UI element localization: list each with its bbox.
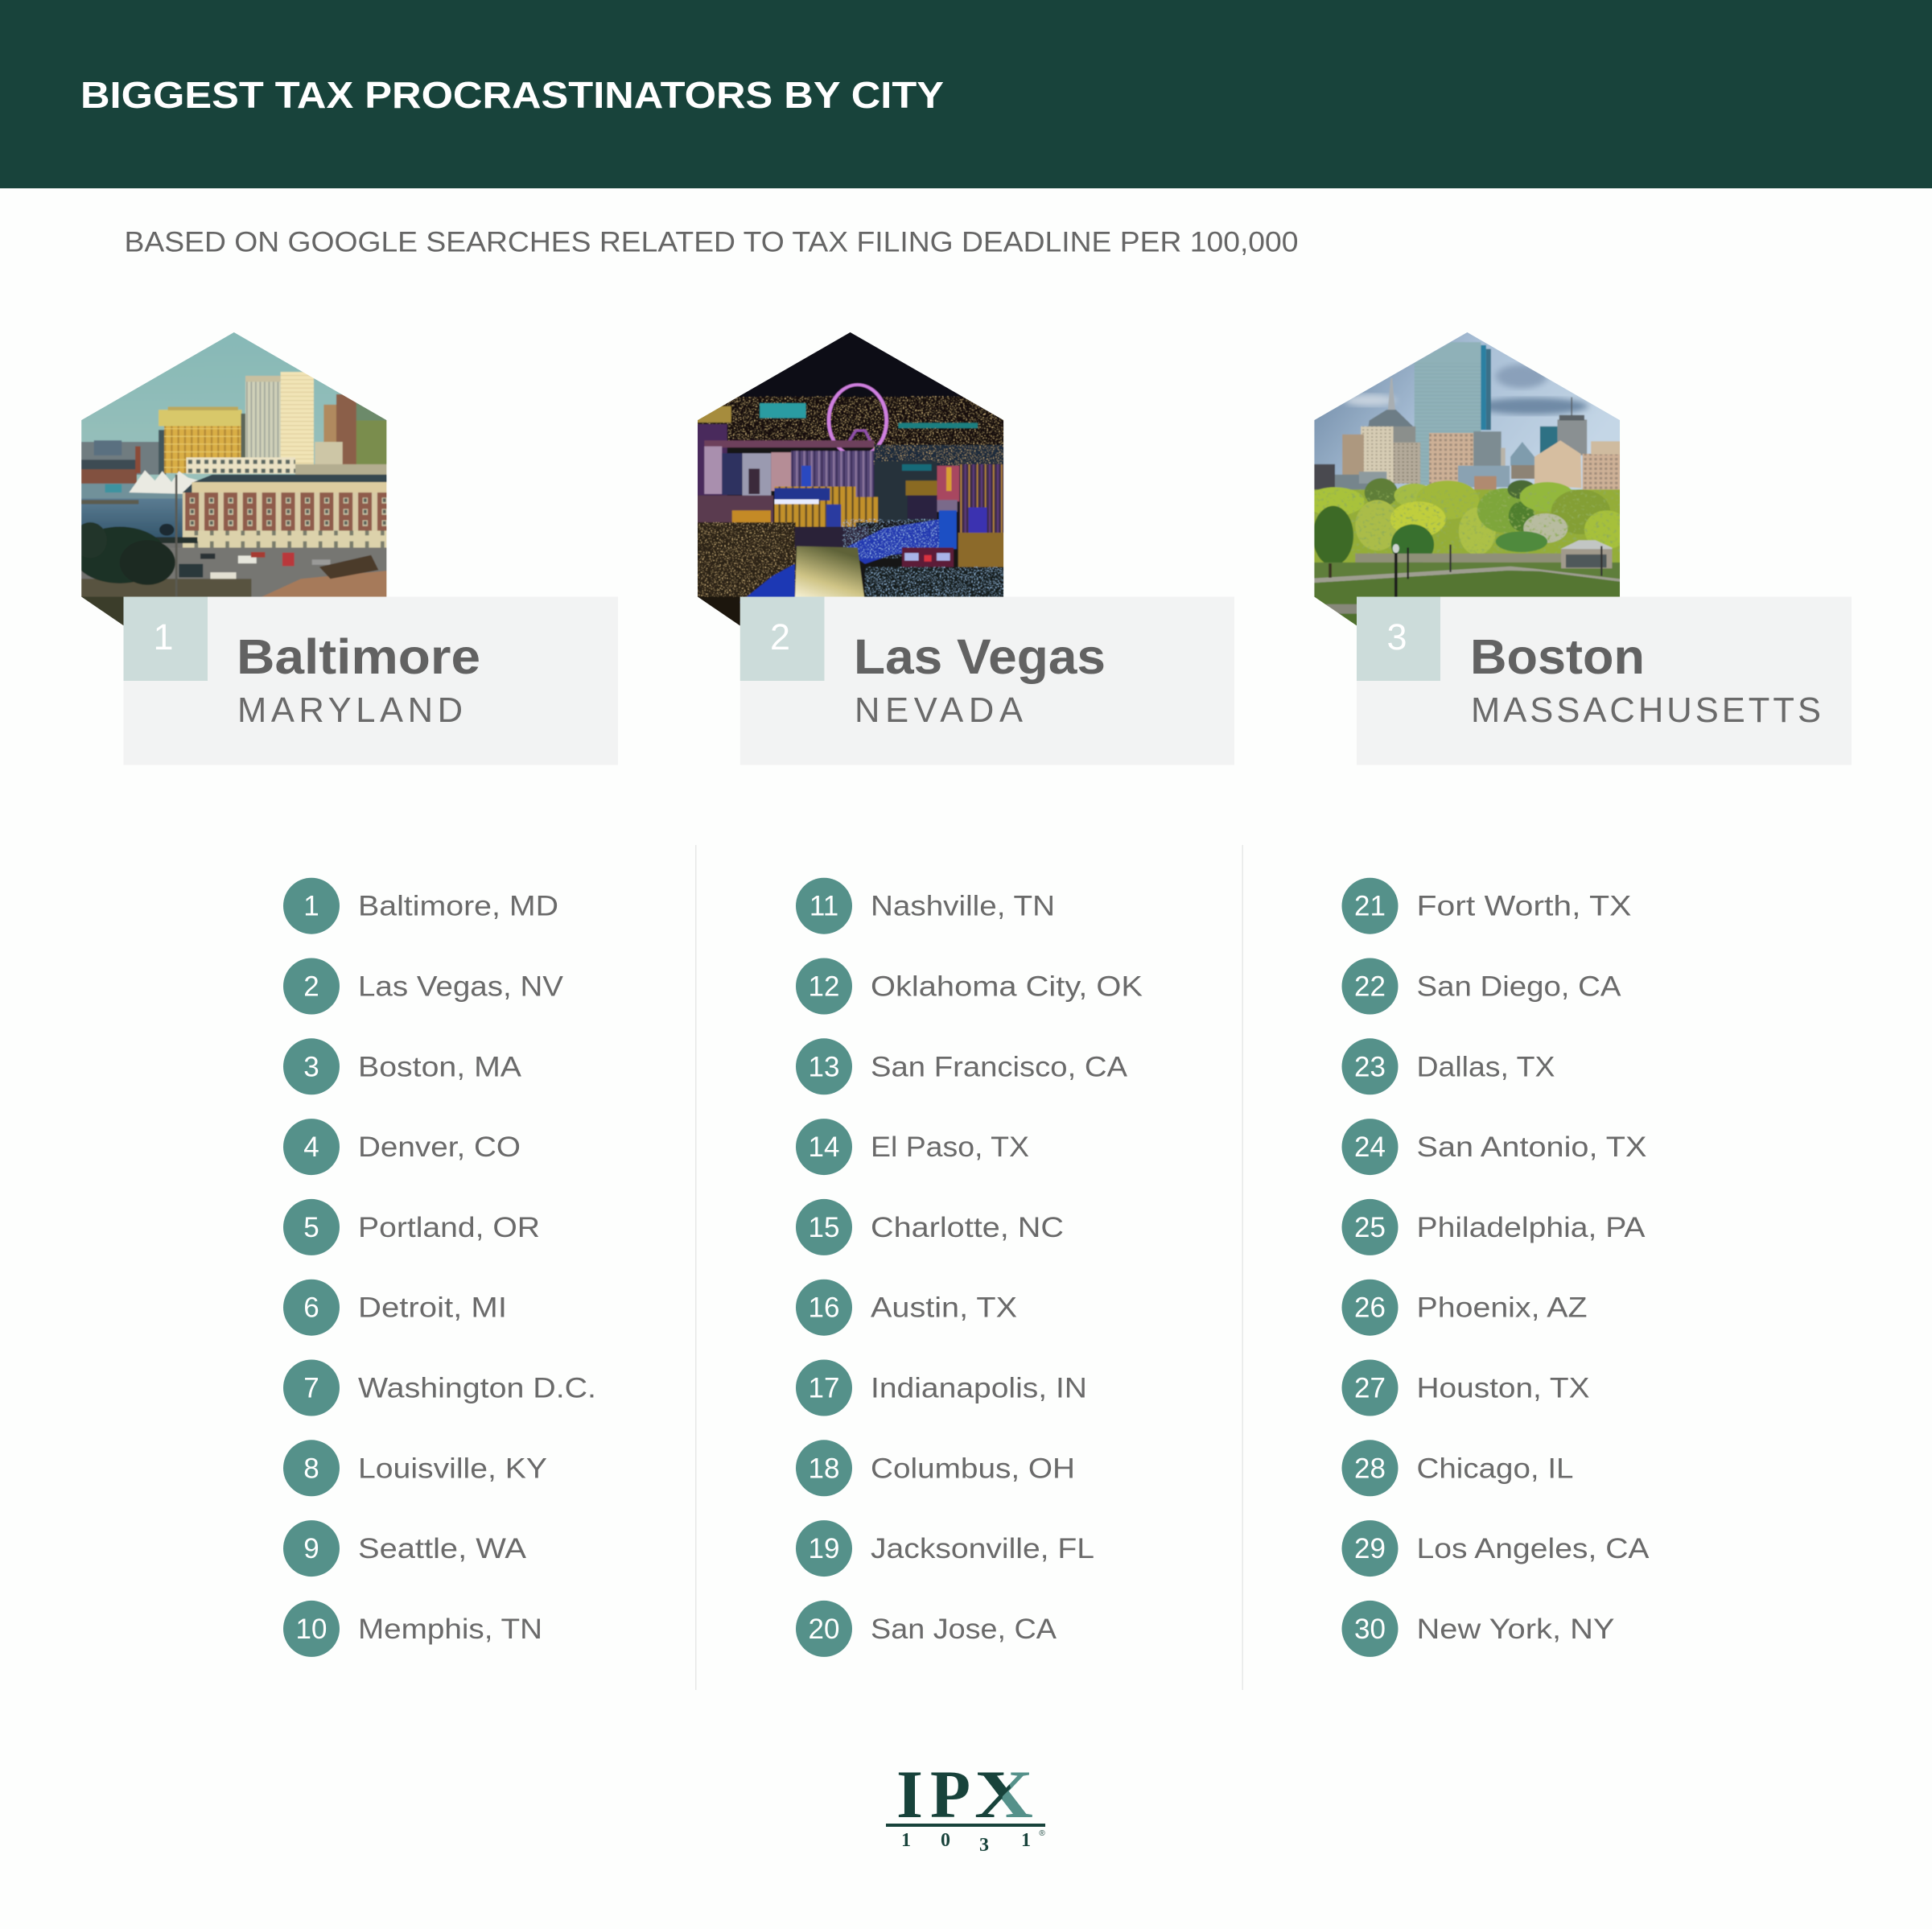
photo: Baltimore skyline hexagon (81, 332, 386, 626)
info card (1357, 597, 1852, 765)
row 23: Dallas, TX (1416, 1051, 1555, 1082)
row 6: 6 (303, 1292, 319, 1324)
row 13: San Francisco, CA (871, 1051, 1128, 1082)
row 3: 3 (303, 1051, 319, 1082)
row 18: Columbus, OH (871, 1453, 1075, 1484)
ranking list column 1 (283, 878, 596, 1657)
logo: IPX 1031: I (896, 1757, 923, 1832)
row 10: Memphis, TN (358, 1614, 542, 1645)
city heading: Las Vegas (854, 629, 1106, 684)
row 3: Boston, MA (358, 1051, 522, 1082)
row 3 (283, 1038, 522, 1094)
row 30: 30 (1354, 1614, 1386, 1645)
row 17: Indianapolis, IN (871, 1373, 1087, 1403)
rank badge: 3 (1386, 616, 1407, 657)
row 11: Nashville, TN (871, 891, 1055, 922)
row 16 (796, 1280, 1017, 1336)
row 4: Denver, CO (358, 1131, 521, 1163)
logo: IPX 1031 (886, 1772, 1045, 1851)
row 18 (796, 1440, 1075, 1496)
header band (0, 0, 1932, 188)
row 24: San Antonio, TX (1416, 1131, 1646, 1163)
row 22: 22 (1354, 971, 1386, 1003)
row 17: 17 (809, 1373, 839, 1403)
info card (740, 597, 1234, 765)
logo: IPX 1031: ® (1039, 1829, 1045, 1838)
row 15 (796, 1199, 1064, 1255)
row 10: 10 (296, 1614, 327, 1645)
rank badge (740, 597, 824, 681)
row 29: 29 (1354, 1533, 1386, 1564)
row 22: San Diego, CA (1416, 971, 1621, 1003)
row 12 (796, 958, 1143, 1014)
city heading: Boston (1470, 629, 1645, 684)
row 21: 21 (1354, 891, 1386, 922)
row 8: Louisville, KY (358, 1453, 547, 1484)
panel: rank 1 Baltimore (72, 326, 618, 765)
row 19: Jacksonville, FL (871, 1533, 1094, 1564)
city heading: Baltimore (237, 629, 480, 684)
row 5 (283, 1199, 540, 1255)
logo: IPX 1031: 3 (979, 1835, 989, 1856)
rank badge: 1 (153, 616, 174, 657)
row 25 (1342, 1199, 1646, 1255)
row 8: 8 (303, 1453, 319, 1484)
logo: IPX 1031: 0 (941, 1830, 950, 1851)
rank badge (124, 597, 208, 681)
row 28 (1342, 1440, 1574, 1496)
row 9 (283, 1520, 527, 1577)
row 2: 2 (303, 971, 319, 1003)
row 20: 20 (809, 1614, 839, 1645)
row 29: Los Angeles, CA (1416, 1533, 1650, 1564)
row 16: 16 (809, 1292, 839, 1324)
info card (124, 597, 618, 765)
row 15: Charlotte, NC (871, 1212, 1064, 1243)
row 20 (796, 1601, 1057, 1657)
row 9: 9 (303, 1533, 319, 1564)
row 2 (283, 958, 564, 1014)
state label: MASSACHUSETTS (1471, 691, 1821, 730)
row 14: 14 (809, 1131, 839, 1163)
row 11: 11 (809, 891, 838, 922)
ranking list column 2 (796, 878, 1143, 1657)
row 23 (1342, 1038, 1555, 1094)
row 8 (283, 1440, 547, 1496)
logo: IPX 1031: X (974, 1757, 1033, 1832)
row 23: 23 (1354, 1051, 1386, 1082)
row 28: 28 (1354, 1453, 1386, 1484)
row 4 (283, 1119, 521, 1175)
row 26 (1342, 1280, 1587, 1336)
row 10 (283, 1601, 542, 1657)
row 16: Austin, TX (871, 1292, 1017, 1324)
row 7: 7 (303, 1373, 319, 1403)
row 12: Oklahoma City, OK (871, 971, 1143, 1003)
row 13 (796, 1038, 1128, 1094)
row 12: 12 (809, 971, 839, 1003)
row 30 (1342, 1601, 1614, 1657)
panel: rank 3 Boston (1304, 326, 1852, 765)
row 11 (796, 878, 1055, 934)
panel: rank 2 Las Vegas (688, 326, 1234, 765)
row 27: Houston, TX (1416, 1373, 1590, 1403)
row 17 (796, 1360, 1087, 1416)
logo: IPX 1031: 1 (901, 1830, 911, 1851)
row 26: Phoenix, AZ (1416, 1292, 1587, 1324)
logo: IPX 1031: 1 (1021, 1830, 1031, 1851)
state label: MARYLAND (237, 691, 463, 730)
row 1: Baltimore, MD (358, 891, 558, 922)
row 27: 27 (1354, 1373, 1386, 1403)
row 14 (796, 1119, 1029, 1175)
row 24: 24 (1354, 1131, 1386, 1163)
row 15: 15 (809, 1212, 839, 1243)
row 18: 18 (809, 1453, 839, 1484)
row 24 (1342, 1119, 1646, 1175)
ranking list column 3 (1342, 878, 1650, 1657)
row 20: San Jose, CA (871, 1614, 1057, 1645)
row 2: Las Vegas, NV (358, 971, 564, 1003)
row 21: Fort Worth, TX (1416, 891, 1632, 922)
logo: IPX 1031: X (974, 1757, 1033, 1832)
row 6: Detroit, MI (358, 1292, 507, 1324)
row 21 (1342, 878, 1632, 934)
row 14: El Paso, TX (871, 1131, 1029, 1163)
rank badge (1357, 597, 1440, 681)
row 26: 26 (1354, 1292, 1386, 1324)
title: BIGGEST TAX PROCRASTINATORS BY CITY (80, 74, 944, 116)
row 7 (283, 1360, 596, 1416)
row 25: Philadelphia, PA (1416, 1212, 1646, 1243)
logo: IPX 1031: P (930, 1757, 970, 1832)
row 5: Portland, OR (358, 1212, 540, 1243)
photo: Boston skyline hexagon (1314, 332, 1620, 626)
row 9: Seattle, WA (358, 1533, 527, 1564)
row 19: 19 (809, 1533, 839, 1564)
photo: Las Vegas strip hexagon (698, 332, 1004, 626)
row 6 (283, 1280, 507, 1336)
subtitle: BASED ON GOOGLE SEARCHES RELATED TO TAX FILING DEADLINE PER 100,000 (124, 227, 1299, 258)
rank badge: 2 (770, 616, 790, 657)
row 25: 25 (1354, 1212, 1386, 1243)
row 7: Washington D.C. (358, 1373, 596, 1403)
row 4: 4 (303, 1131, 319, 1163)
row 1: 1 (303, 891, 319, 922)
state label: NEVADA (855, 691, 1023, 730)
row 5: 5 (303, 1212, 319, 1243)
row 29 (1342, 1520, 1650, 1577)
row 30: New York, NY (1416, 1614, 1614, 1645)
row 19 (796, 1520, 1094, 1577)
row 27 (1342, 1360, 1590, 1416)
row 1 (283, 878, 558, 934)
row 22 (1342, 958, 1621, 1014)
row 13: 13 (809, 1051, 839, 1082)
row 28: Chicago, IL (1416, 1453, 1574, 1484)
